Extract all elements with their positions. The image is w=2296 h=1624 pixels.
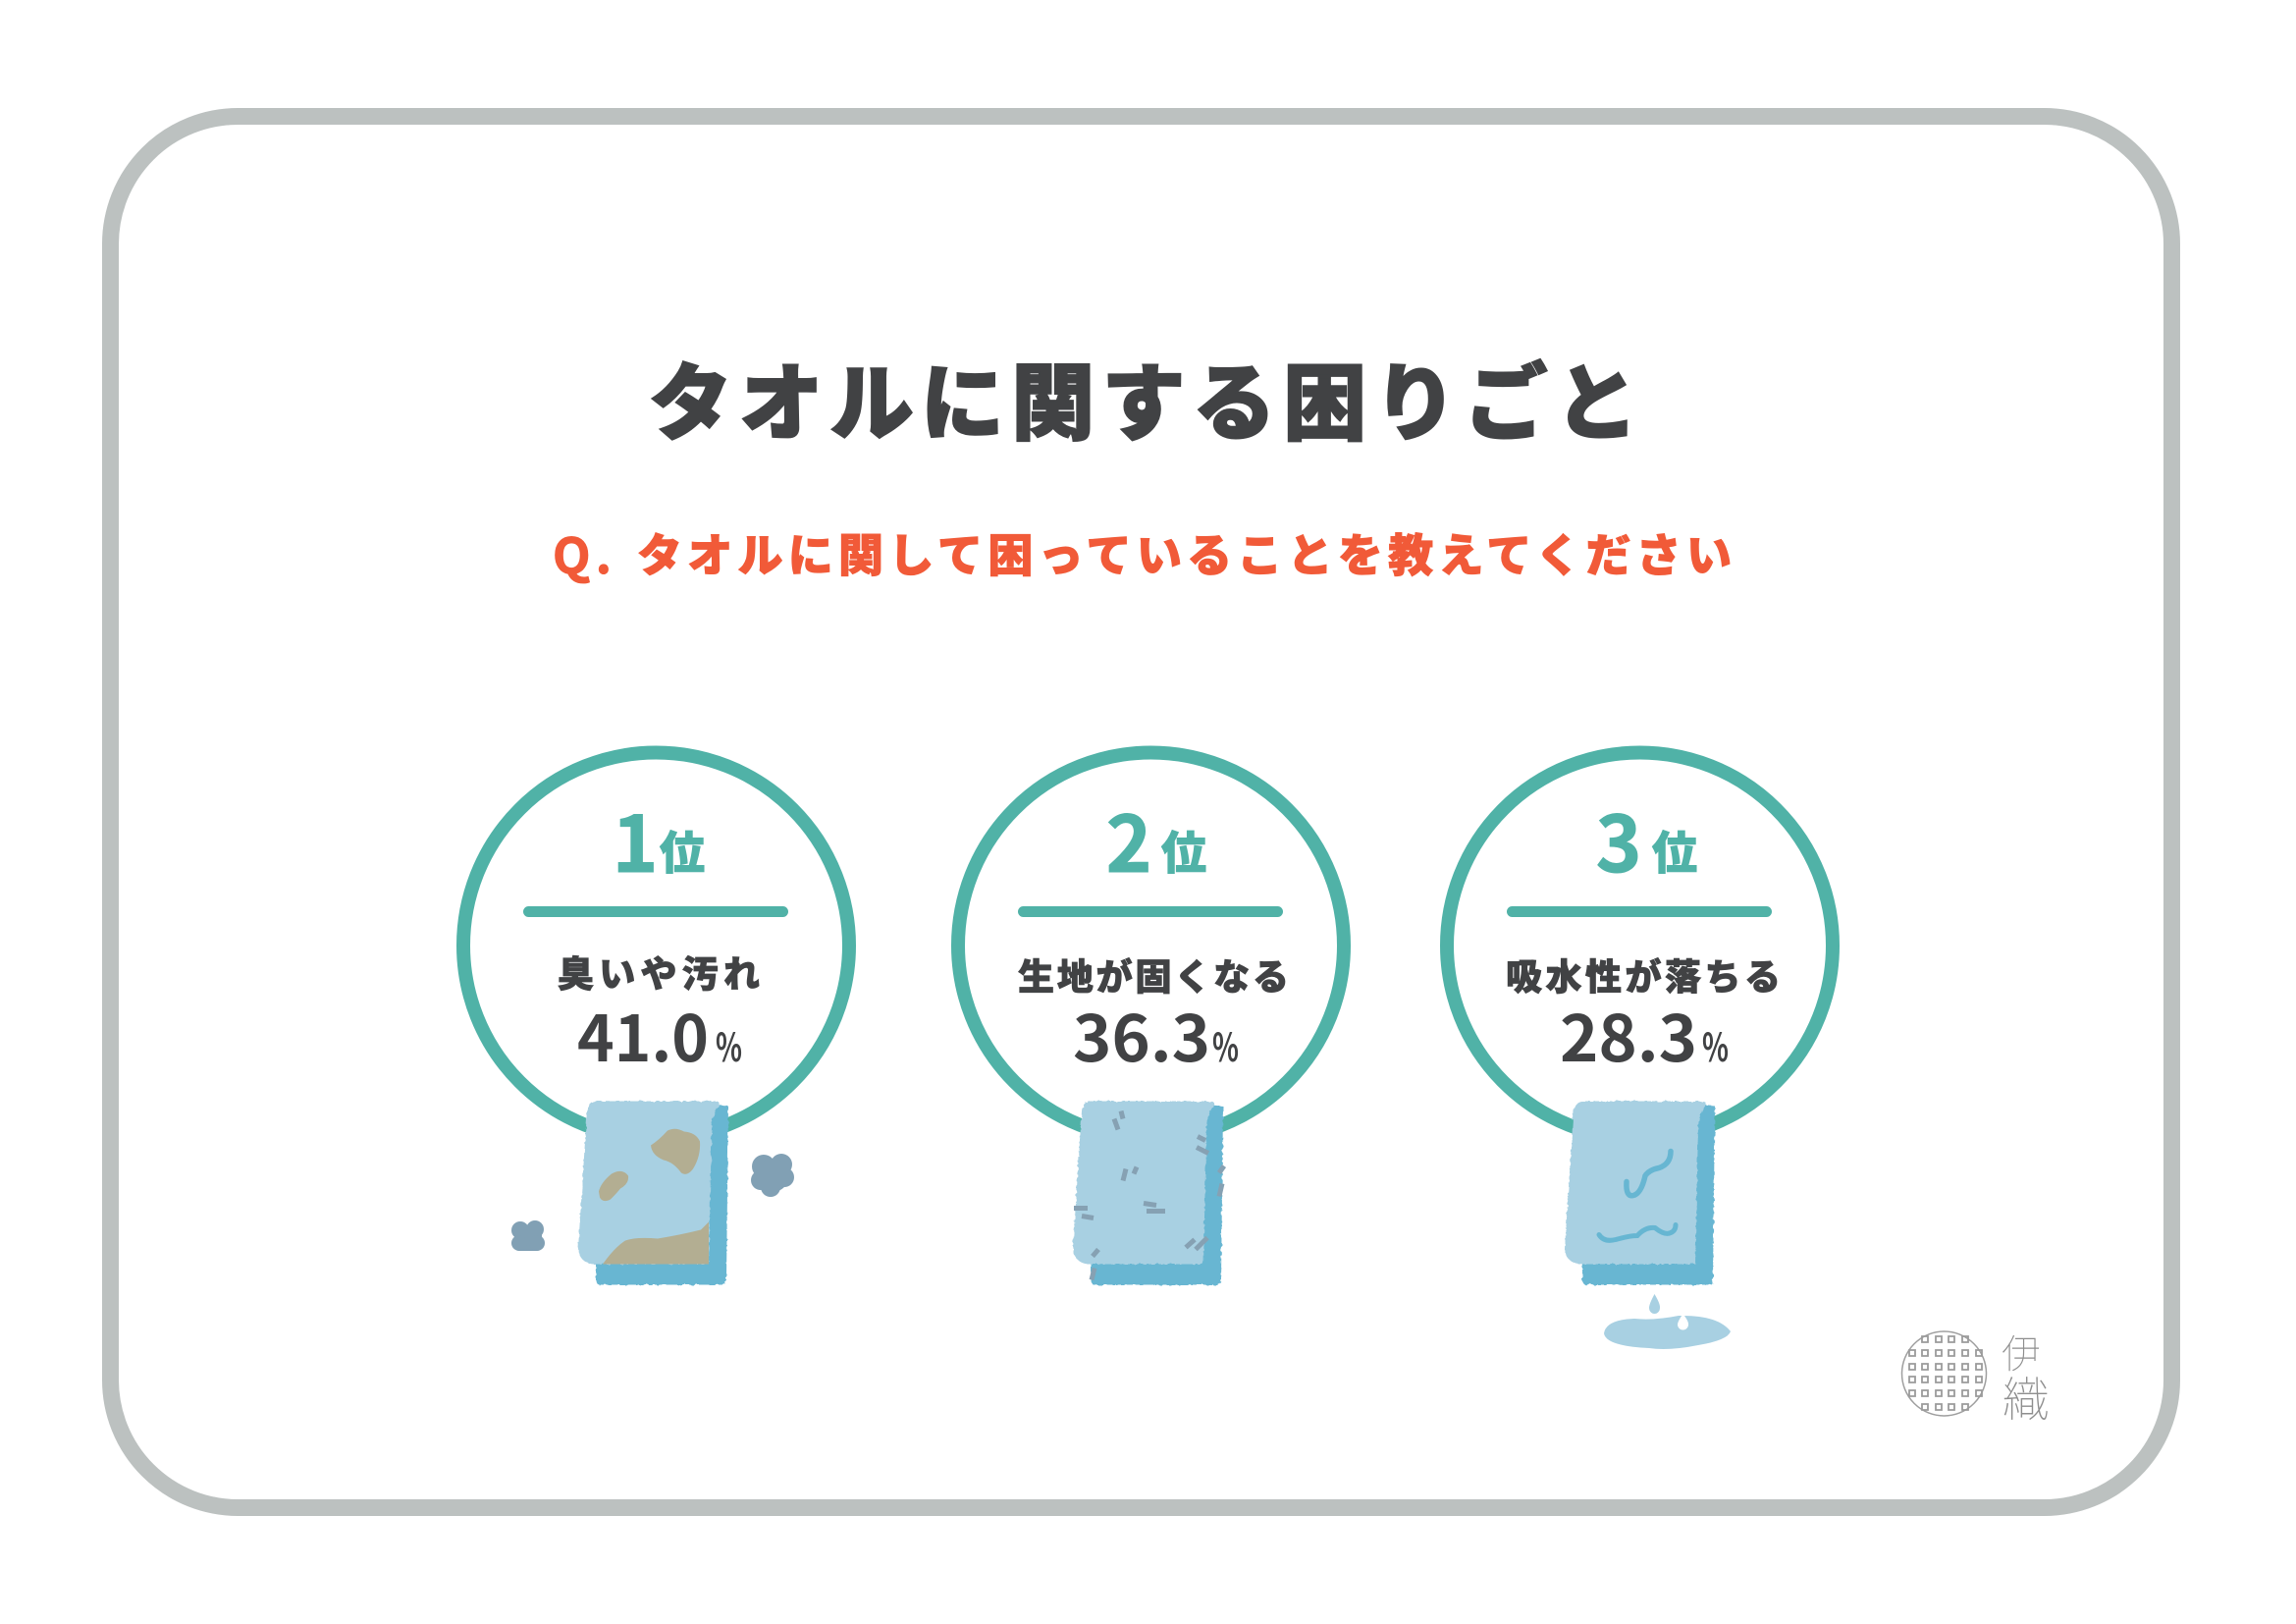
percentage: % — [1702, 1016, 1729, 1073]
page frame — [110, 116, 2171, 1508]
rank label: 2 — [1106, 782, 1151, 894]
icon: water drop — [1649, 1294, 1660, 1314]
icon: odor cloud left — [511, 1220, 545, 1251]
divider — [523, 906, 788, 917]
panel: rank 3: 位 — [1652, 818, 1697, 883]
rank label: 3 — [1596, 782, 1641, 894]
icon: wet towel — [1565, 1102, 1715, 1284]
rank label: 1 — [613, 782, 658, 894]
label: 生地が固くなる — [1018, 947, 1289, 1001]
panel: rank 2: 位 — [1161, 818, 1206, 883]
label: 吸水性が落ちる — [1506, 947, 1781, 1001]
panel: rank 3 — [1447, 752, 1833, 1349]
question subtitle: Q. — [553, 517, 612, 588]
divider — [1507, 906, 1772, 917]
label: 臭いや汚れ — [558, 945, 760, 998]
logo mark — [1902, 1331, 1987, 1416]
logo text — [2002, 1323, 2050, 1430]
logo: 伊織 — [1902, 1323, 2050, 1430]
ring — [958, 752, 1344, 1139]
question subtitle: タオルに関して困っていることを教えてください — [637, 520, 1732, 585]
logo text: 伊 — [2002, 1323, 2041, 1380]
panel: rank 1: 位 — [660, 818, 705, 883]
divider — [1018, 906, 1283, 917]
icon: puddle — [1604, 1314, 1731, 1349]
ring — [1447, 752, 1833, 1139]
logo text: 織 — [2002, 1361, 2050, 1430]
ring — [463, 752, 849, 1139]
percentage: % — [1212, 1016, 1239, 1073]
title: タオルに関する困りごと — [649, 337, 1638, 458]
icon: stiff towel — [1073, 1102, 1224, 1284]
percentage: 36.3 — [1073, 988, 1210, 1080]
percentage: 28.3 — [1560, 988, 1697, 1080]
percentage: 41.0 — [577, 988, 709, 1080]
icon: stained towel — [578, 1102, 728, 1284]
icon: odor cloud right — [751, 1154, 794, 1197]
panel: rank 2 — [958, 752, 1344, 1284]
panel: rank 1 — [463, 752, 849, 1284]
percentage: % — [716, 1016, 742, 1073]
